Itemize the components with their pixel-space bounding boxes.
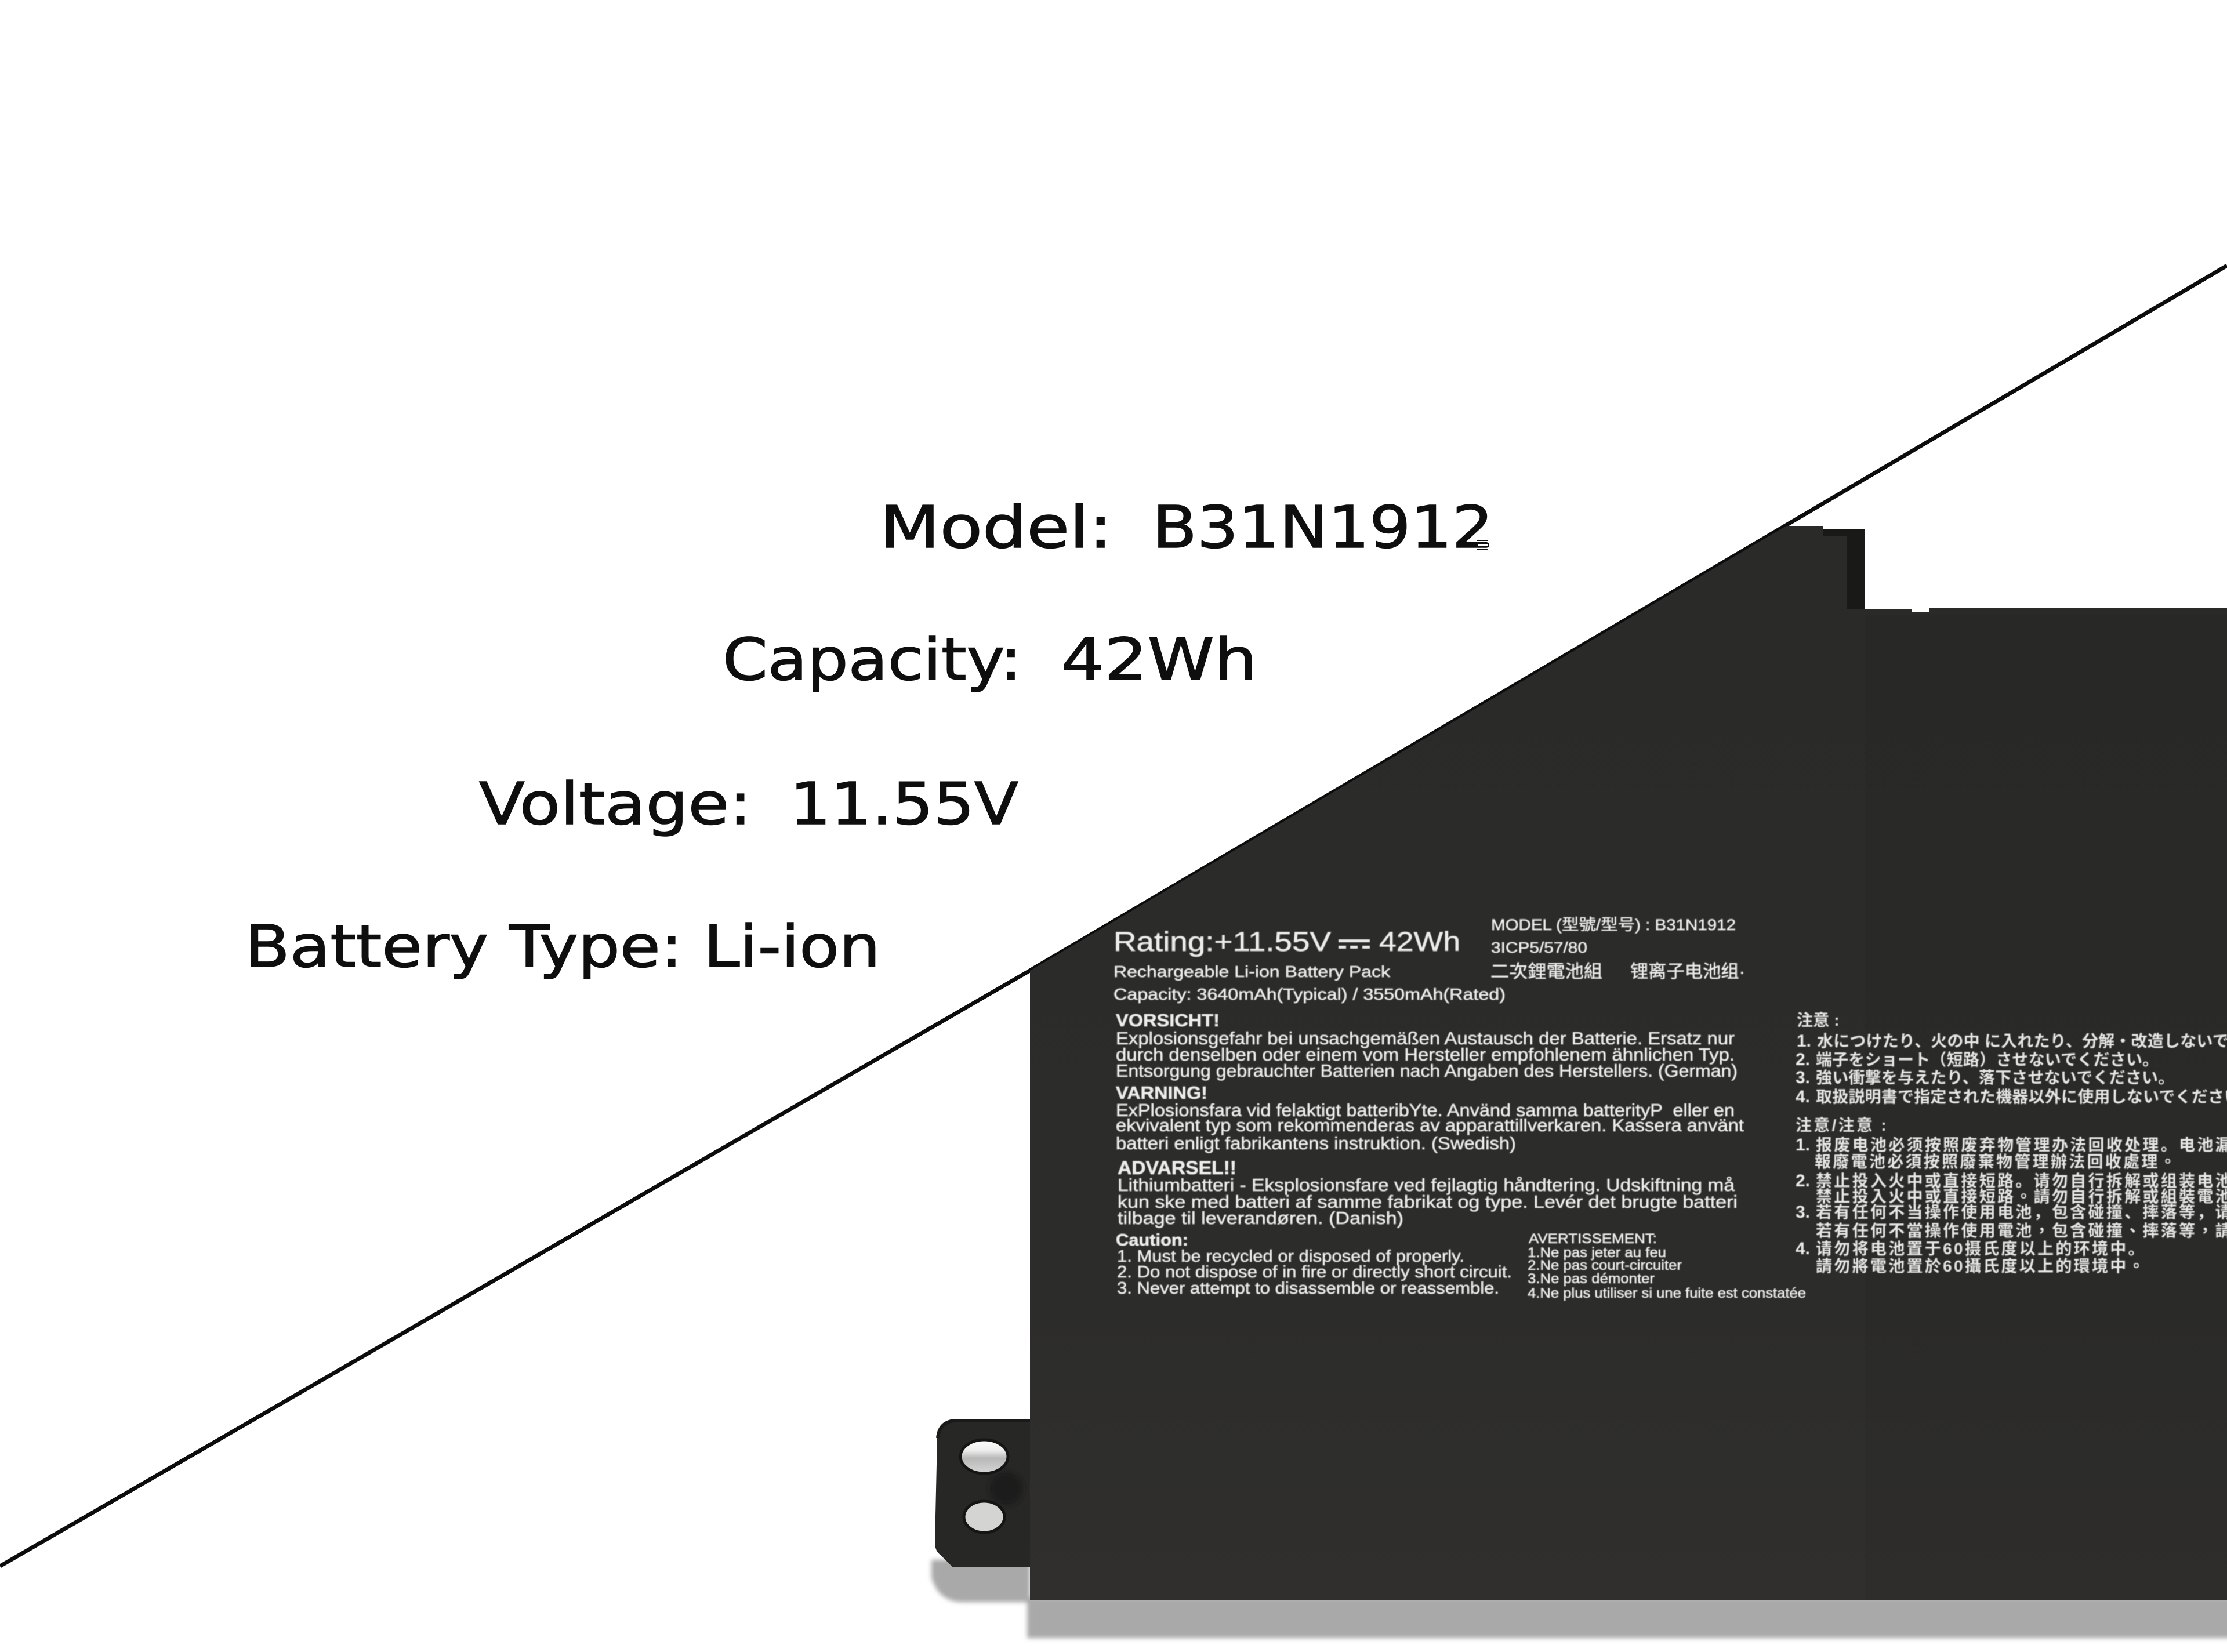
tab dark screw mark — [989, 1472, 1023, 1505]
Swedish warning: batteri enligt fabrikantens instruktion. (Swedish) — [1116, 1133, 1516, 1153]
rating block: Rating:+11.55V — [1114, 926, 1332, 957]
Swedish warning — [1116, 1083, 1744, 1153]
Swedish warning: ExPlosionsfara vid felaktigt batteribYte. Använd samma batterityP eller en — [1116, 1100, 1735, 1120]
voltage: Voltage: — [479, 770, 752, 838]
German warning: durch denselben oder einem vom Hersteller empfohlenem ähnlichen Typ. — [1116, 1044, 1735, 1065]
tab upper hole — [960, 1440, 1008, 1473]
Japanese caution: 強い衝撃を与えたり、落下させないでください。 — [1816, 1069, 2174, 1087]
English caution: 1. Must be recycled or disposed of properly. — [1117, 1247, 1464, 1266]
model: Model: — [880, 493, 1112, 561]
Japanese caution: 1. — [1797, 1032, 1811, 1051]
battery mounting tab — [935, 1419, 1032, 1567]
model block: MODEL (型號/型号) : B31N1912 — [1491, 916, 1736, 934]
model — [880, 493, 1493, 561]
German warning: Entsorgung gebrauchter Batterien nach Angaben des Herstellers. (German) — [1116, 1061, 1738, 1081]
Chinese caution: 1. — [1796, 1135, 1810, 1154]
battery type: Battery Type: — [245, 913, 683, 981]
specification text — [245, 493, 1493, 981]
Danish warning: tilbage til leverandøren. (Danish) — [1118, 1208, 1403, 1228]
rating block: Rechargeable Li-ion Battery Pack — [1114, 963, 1391, 981]
Japanese caution: 3. — [1796, 1068, 1810, 1087]
French warning: 4.Ne plus utiliser si une fuite est constatée — [1528, 1286, 1806, 1301]
model block: 二次鋰電池組 — [1490, 961, 1602, 982]
model: B31N1912 — [1152, 493, 1493, 561]
rating block — [1114, 926, 1506, 1003]
diagonal divider line — [0, 266, 2227, 1566]
Chinese caution: 禁止投入火中或直接短路。请勿自行拆解或组装电池 — [1816, 1171, 2227, 1190]
German warning: Explosionsgefahr bei unsachgemäßen Austausch der Batterie. Ersatz nur — [1116, 1028, 1735, 1048]
tab lower hole — [964, 1501, 1004, 1533]
Japanese caution — [1796, 1011, 2227, 1106]
capacity: Capacity: — [723, 626, 1022, 694]
French warning — [1528, 1231, 1806, 1301]
Japanese caution: 注意 : — [1797, 1011, 1840, 1029]
Swedish warning: VARNING! — [1116, 1083, 1207, 1103]
Swedish warning: ekvivalent typ som rekommenderas av apparattillverkaren. Kassera använt — [1116, 1115, 1744, 1135]
Japanese caution: 4. — [1796, 1087, 1810, 1106]
Chinese caution: 注意/注意 : — [1796, 1116, 1888, 1134]
Danish warning: ADVARSEL!! — [1118, 1157, 1236, 1178]
Chinese caution: 若有任何不當操作使用電池，包含碰撞、摔落等，請 — [1816, 1222, 2227, 1240]
French warning: 2.Ne pas court-circuiter — [1528, 1258, 1682, 1273]
battery right panel shading — [1865, 615, 2227, 1600]
English caution: 3. Never attempt to disassemble or reassemble. — [1117, 1279, 1499, 1298]
Danish warning: Lithiumbatteri - Eksplosionsfare ved fejlagtig håndtering. Udskiftning må — [1118, 1175, 1735, 1195]
Chinese caution: 3. — [1796, 1203, 1810, 1222]
small artifact mark on model text — [1477, 540, 1488, 549]
Chinese caution: 報廢電池必須按照廢棄物管理辦法回收處理。 — [1815, 1153, 2178, 1171]
Chinese caution: 2. — [1796, 1171, 1810, 1190]
Chinese caution: 禁止投入火中或直接短路。請勿自行拆解或組裝電池 — [1816, 1187, 2227, 1206]
French warning: AVERTISSEMENT: — [1529, 1231, 1657, 1247]
German warning — [1116, 1010, 1738, 1081]
capacity — [723, 626, 1257, 694]
English caution: 2. Do not dispose of in fire or directly short circuit. — [1117, 1263, 1512, 1281]
battery drop shadow — [931, 1560, 2227, 1638]
battery type — [245, 913, 880, 981]
Chinese caution: 請勿將電池置於60攝氏度以上的環境中。 — [1816, 1257, 2146, 1275]
Chinese caution: 4. — [1796, 1239, 1810, 1258]
English caution — [1116, 1231, 1512, 1298]
Danish warning: kun ske med batteri af samme fabrikat og type. Levér det brugte batteri — [1118, 1192, 1738, 1212]
Japanese caution: 端子をショート（短路）させないでください。 — [1816, 1051, 2159, 1069]
French warning: 1.Ne pas jeter au feu — [1528, 1245, 1666, 1261]
model block: 锂离子电池组· — [1630, 961, 1745, 982]
battery body — [1030, 526, 2227, 1600]
Chinese caution: 若有任何不当操作使用电池，包含碰撞、摔落等，请 — [1816, 1203, 2227, 1221]
battery type: Li-ion — [703, 913, 880, 981]
capacity: 42Wh — [1061, 626, 1257, 694]
German warning: VORSICHT! — [1116, 1010, 1220, 1030]
model block — [1490, 916, 1745, 982]
Chinese caution: 请勿将电池置于60摄氏度以上的环境中。 — [1816, 1240, 2146, 1258]
French warning: 3.Ne pas démonter — [1528, 1271, 1655, 1287]
Chinese caution — [1796, 1116, 2227, 1275]
DC symbol — [1339, 939, 1370, 949]
rating block: Capacity: 3640mAh(Typical) / 3550mAh(Rated) — [1114, 985, 1506, 1003]
voltage — [479, 770, 1018, 838]
battery label printed text — [1114, 916, 2227, 1301]
rating block: 42Wh — [1379, 926, 1460, 957]
battery pack — [935, 526, 2227, 1600]
Danish warning — [1118, 1157, 1738, 1228]
model block: 3ICP5/57/80 — [1491, 939, 1587, 956]
battery top-right notch shading — [1823, 529, 1865, 609]
voltage: 11.55V — [790, 770, 1018, 838]
English caution: Caution: — [1116, 1231, 1188, 1250]
Japanese caution: 2. — [1796, 1050, 1810, 1069]
